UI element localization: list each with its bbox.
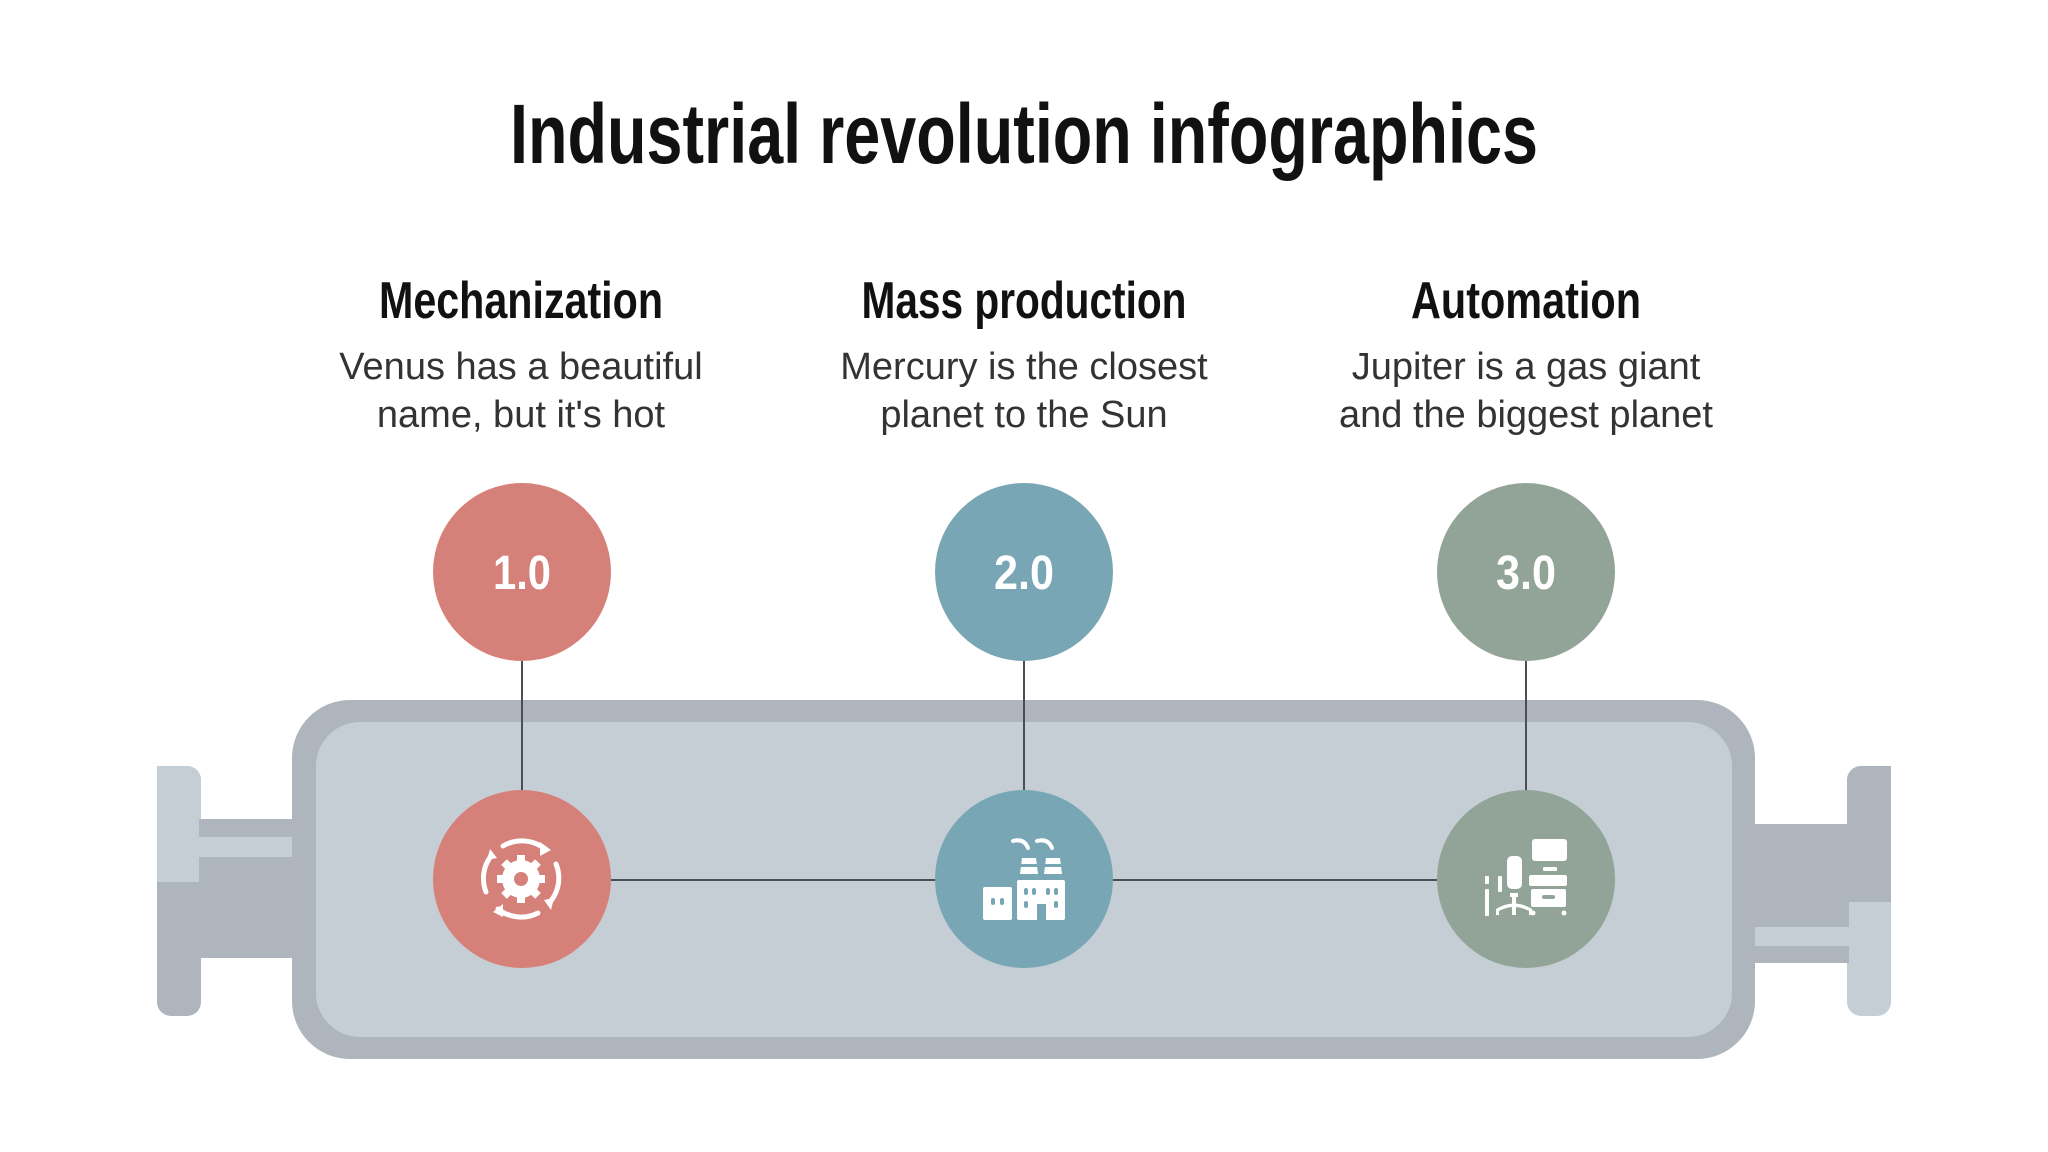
circle: 2.0: 2.0 xyxy=(994,547,1054,600)
connectors xyxy=(522,661,1526,880)
column 1: Mechanization xyxy=(339,272,703,968)
right flange xyxy=(1753,766,1891,1016)
icon: gear with arrows xyxy=(433,790,611,968)
text: Mass production description: planet to the Sun xyxy=(880,394,1168,436)
circle: 3.0 xyxy=(1437,483,1615,661)
circle: 2.0 xyxy=(935,483,1113,661)
text: Mass production description: Mercury is the closest xyxy=(840,346,1208,388)
title: Industrial revolution infographics xyxy=(510,87,1538,181)
text: Automation description: and the biggest planet xyxy=(1339,394,1713,436)
circle: 1.0: 1.0 xyxy=(493,547,551,600)
column 2: Mass production xyxy=(840,272,1208,968)
text: Mechanization description: name, but it's hot xyxy=(377,394,666,436)
text: Mechanization description: Venus has a beautiful xyxy=(339,346,703,388)
heading: Mechanization: Mechanization xyxy=(379,272,663,330)
text: Automation description: Jupiter is a gas giant xyxy=(1352,346,1701,388)
column 3: Automation xyxy=(1339,272,1713,968)
icon: factory xyxy=(935,790,1113,968)
heading: Mass production: Mass production xyxy=(862,272,1186,330)
icon: office desk xyxy=(1437,790,1615,968)
circle: 3.0: 3.0 xyxy=(1496,547,1556,600)
left flange xyxy=(157,766,294,1016)
pipe body xyxy=(292,700,1755,1059)
pipe assembly xyxy=(157,700,1891,1059)
heading: Automation: Automation xyxy=(1411,272,1641,330)
circle: 1.0 xyxy=(433,483,611,661)
